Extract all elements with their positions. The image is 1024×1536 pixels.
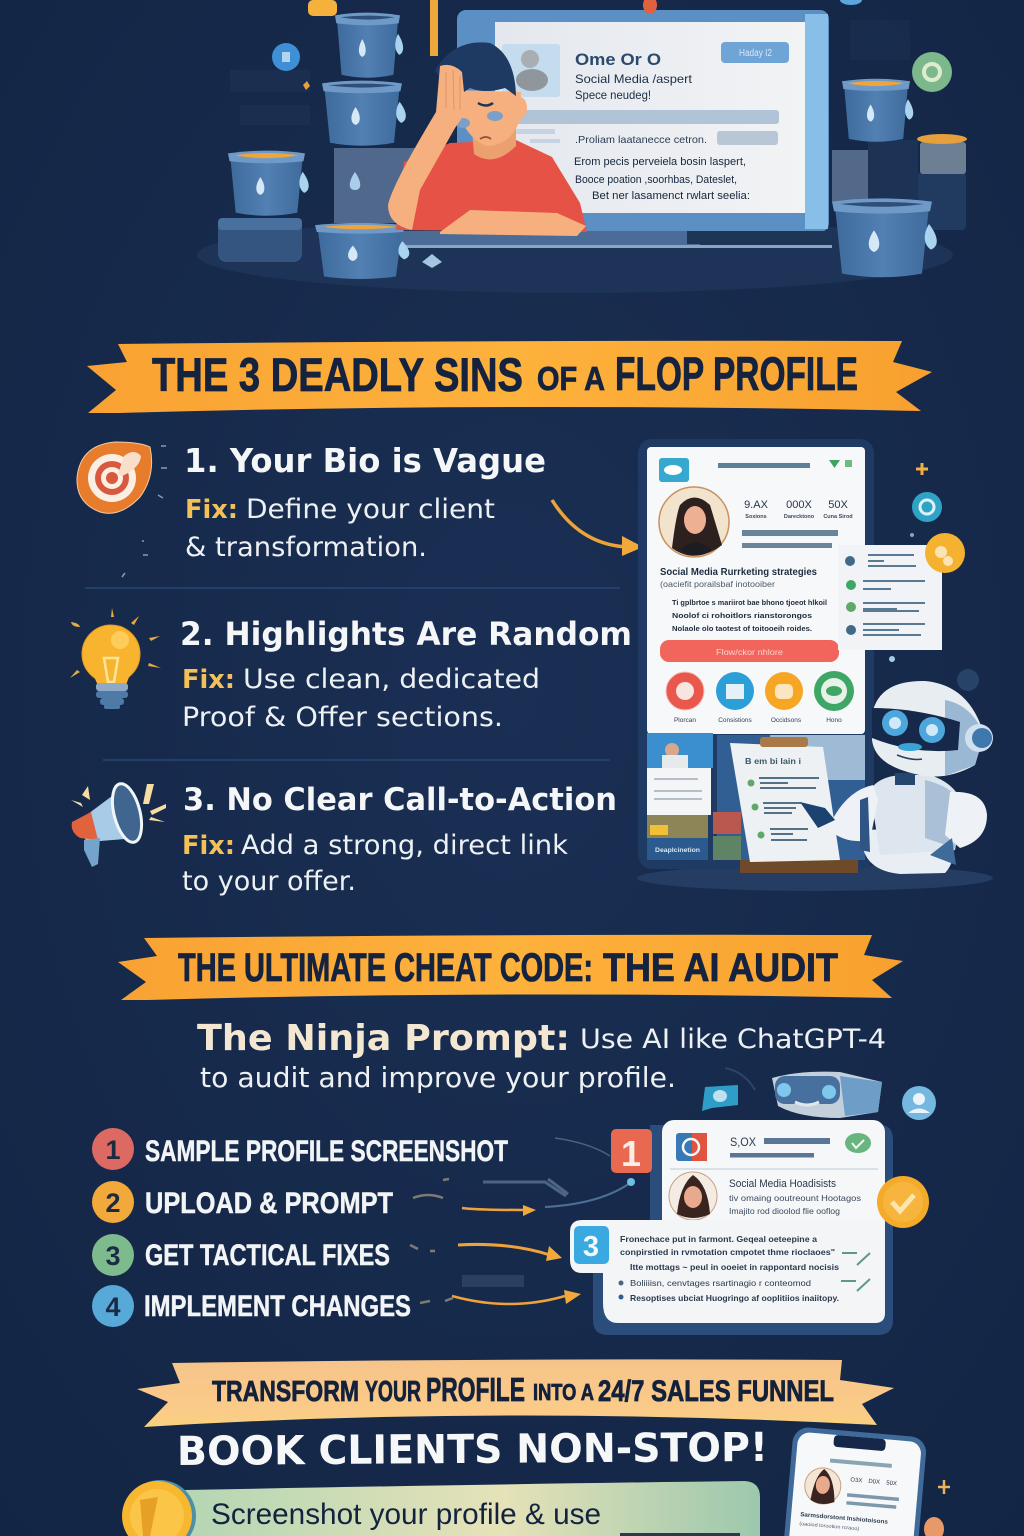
item 1: bio is vague: & transformation. (185, 532, 427, 563)
buckets right (832, 79, 967, 277)
stats: Soxions (745, 514, 767, 520)
stats: Cuna Sirod (823, 514, 853, 520)
item 1: bio is vague: 1. Your Bio is Vague (184, 441, 546, 480)
lower audit card: Boliiiisn, cenvtages rsartinagio r conteomod (630, 1278, 811, 1288)
top profile card (662, 1120, 885, 1232)
avatar (659, 487, 729, 557)
item 1: bio is vague: Define your client (246, 494, 495, 525)
banner: transform your profile: INTO A (533, 1379, 594, 1405)
banner: the 3 deadly sins (87, 341, 932, 413)
laptop: Social Media /aspert (575, 72, 693, 86)
item 3: no clear call to action: Add a strong, direct link (241, 830, 568, 861)
phone profile mockup with robot: Ti gplbrtoe s mariirot bae bhono tjoeot hlkoil (672, 598, 827, 607)
ninja prompt intro: The Ninja Prompt: (197, 1018, 570, 1059)
call to action box: Screenshot your profile & use (211, 1498, 601, 1531)
small phone with profile: Sarmsdorstont Inshiotoisons (800, 1512, 889, 1526)
c badge and sparkle (889, 463, 942, 662)
floating icons (702, 1068, 936, 1228)
top profile card: S,OX (730, 1135, 756, 1149)
hero illustration: overwhelmed man at laptop with leaking buckets (197, 0, 967, 293)
highlight circles: Hono (826, 717, 842, 724)
banner: the 3 deadly sins: FLOP PROFILE (615, 347, 858, 400)
item 3: no clear call to action: 3. No Clear Call-to-Action (183, 782, 617, 818)
clipboard: B em bi lain i (745, 757, 801, 766)
ninja prompt intro: to audit and improve your profile. (200, 1061, 676, 1094)
top profile card: Imajito rod dioolod flie ooflog (729, 1206, 840, 1216)
robot (800, 669, 993, 874)
item 3: no clear call to action: Fix: (182, 831, 235, 861)
buckets left (218, 13, 424, 279)
red button: Flow/ckor nhlore (716, 647, 783, 657)
small phone with profile: 50X (886, 1480, 897, 1487)
small phone with profile: O3X (850, 1477, 863, 1484)
laptop: Spece neudeg! (575, 88, 651, 102)
laptop: Booce poation ,soorhbas, Dateslet, (575, 174, 737, 186)
lower audit card: conpirstied in rvmotation cmpotet thme rioclaoes" (620, 1247, 835, 1257)
step 2: UPLOAD & PROMPT (145, 1187, 393, 1220)
small phone with profile: (oaoiod torootion rcraoo) (799, 1521, 860, 1532)
banner: the 3 deadly sins: OF A (537, 360, 605, 397)
banner: the 3 deadly sins: THE 3 DEADLY SINS (152, 348, 523, 401)
banner: the ultimate cheat code (118, 935, 903, 1000)
item 3: no clear call to action: to your offer. (182, 866, 356, 897)
arrow to phone (552, 500, 643, 556)
floating badges and decor (272, 0, 952, 268)
call to action box (185, 1481, 760, 1536)
item 2: highlights are random: Fix: (182, 665, 235, 695)
step 4 (92, 1285, 411, 1327)
highlight circles: Plorcan (674, 717, 696, 724)
numbered steps list (92, 1128, 508, 1327)
step 1: SAMPLE PROFILE SCREENSHOT (145, 1135, 508, 1168)
step 1 (92, 1128, 508, 1170)
highlight circles (666, 671, 854, 724)
ninja prompt intro: Use AI like ChatGPT-4 (580, 1024, 886, 1055)
photo grid: Deaplcinetion (655, 847, 700, 854)
step 1: 1 (105, 1135, 121, 1165)
number tiles (574, 1129, 652, 1264)
step 2: 2 (105, 1188, 121, 1218)
highlight circles: Occidsons (771, 717, 802, 724)
banner: transform your profile: YOUR (365, 1376, 421, 1408)
lower audit card: Fronechace put in farmont. Geqeal oeteepine a (620, 1234, 817, 1244)
red button (660, 640, 839, 662)
floating checklist card (838, 533, 965, 650)
step 2 (92, 1181, 393, 1223)
headline: book clients non-stop: BOOK CLIENTS NON-STOP! (177, 1425, 768, 1475)
laptop: Ome Or O (575, 50, 661, 69)
phone profile mockup with robot: Social Media Rurrketing strategies (660, 567, 817, 578)
ai audit card mockup (570, 1068, 936, 1335)
highlight circles: Consistions (718, 717, 753, 724)
item 1: bio is vague (77, 441, 546, 577)
icon: megaphone (71, 781, 166, 867)
phone profile mockup with robot: (oaciefit porailsbaf inotooiber (660, 580, 775, 589)
photo grid (647, 733, 865, 860)
icon: light bulb (70, 608, 161, 709)
banner: transform your profile (137, 1359, 894, 1427)
banner: transform your profile: TRANSFORM (212, 1376, 359, 1408)
stats: 000X (786, 499, 813, 511)
small phone with profile: D0X (868, 1479, 880, 1486)
top profile card: tiv omaing ooutreount Hootagos (729, 1193, 861, 1203)
robot head (772, 1072, 882, 1118)
step 3 (92, 1234, 390, 1276)
ninja prompt intro (197, 1018, 886, 1094)
phone profile mockup with robot: Noolof ci rohoitlors rianstorongos (672, 611, 812, 620)
banner: the ultimate cheat code: THE ULTIMATE CHEAT CODE: (178, 946, 593, 990)
item 2: highlights are random: Use clean, dedicated (243, 664, 540, 695)
step 4: 4 (105, 1292, 121, 1322)
laptop: Erom pecis perveiela bosin laspert, (574, 156, 746, 168)
top profile card: Social Media Hoadisists (729, 1178, 836, 1190)
item 2: highlights are random (70, 608, 632, 733)
item 1: bio is vague: Fix: (185, 495, 238, 525)
banner: transform your profile: 24/7 SALES FUNNEL (598, 1375, 834, 1408)
instagram icon (676, 1133, 707, 1161)
number tiles: 3 (583, 1231, 599, 1263)
icon: target (77, 442, 167, 577)
step 3: GET TACTICAL FIXES (145, 1239, 390, 1272)
item 2: highlights are random: Proof & Offer sections. (182, 702, 503, 733)
step 4: IMPLEMENT CHANGES (144, 1290, 411, 1323)
stats: 9.AX (744, 499, 769, 511)
banner: the ultimate cheat code: THE AI AUDIT (603, 946, 838, 990)
clipboard (730, 737, 858, 873)
phone profile mockup with robot: Nolaole olo taotest of toitooeih roides. (672, 624, 812, 633)
man (388, 42, 587, 236)
stats (744, 499, 853, 520)
laptop: Bet ner lasamenct rwlart seelia: (592, 190, 750, 202)
stats: Darecktono (784, 514, 815, 520)
step 3: 3 (105, 1241, 121, 1271)
small phone with profile (782, 1426, 950, 1536)
flow arrows (410, 1138, 635, 1304)
laptop (400, 10, 832, 248)
item 2: highlights are random: 2. Highlights Are Random (180, 615, 632, 653)
number tiles: 1 (621, 1133, 641, 1174)
banner: transform your profile: PROFILE (426, 1371, 525, 1408)
lower audit card: Resoptises ubciat Huogringo af ooplitiios inaiitopy. (630, 1293, 839, 1303)
lower audit card (570, 1220, 885, 1323)
icon: gold coin (122, 1480, 196, 1536)
phone profile mockup with robot (637, 439, 993, 891)
stats: 50X (828, 499, 848, 511)
item 3: no clear call to action (71, 781, 617, 897)
laptop: Haday I2 (739, 48, 772, 59)
laptop: .Proliam laatanecce cetron. (575, 134, 707, 146)
lower audit card: Itte mottags ~ peul in ooeiet in rappontard nocisis (630, 1262, 839, 1272)
